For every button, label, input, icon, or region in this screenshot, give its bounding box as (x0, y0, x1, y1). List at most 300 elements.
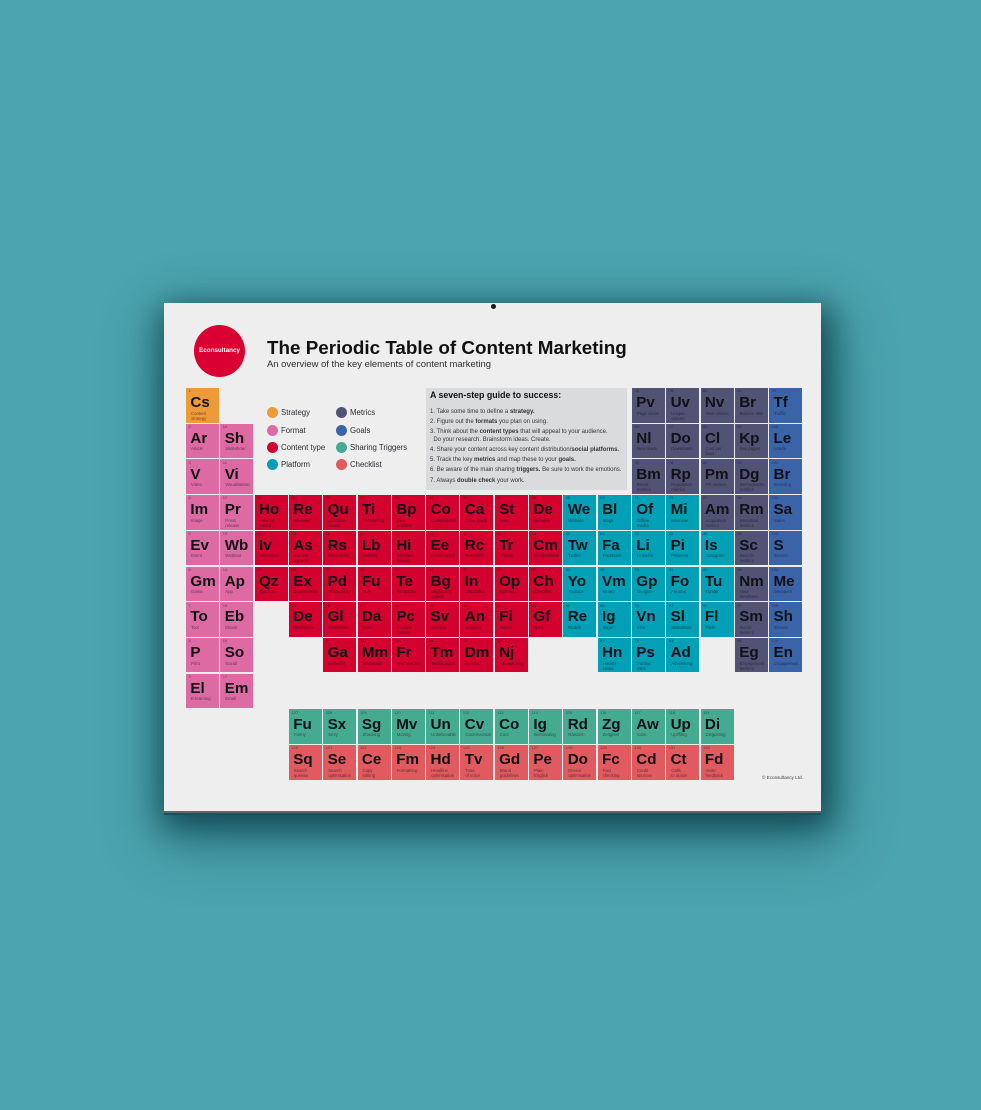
element: Br (735, 388, 768, 423)
element: Qz (255, 566, 288, 601)
element: Tu: Tumblr (706, 589, 719, 594)
element: Sa: 102 (772, 495, 778, 500)
element: Iv (255, 531, 288, 565)
panel: seven-step guide (426, 388, 627, 490)
element: Tr (495, 531, 528, 565)
element: Is: Is (705, 537, 718, 554)
element: Hn: Hacker (603, 661, 616, 666)
element: Gl: 28 (326, 603, 330, 608)
element: Rd: 115 (566, 710, 572, 715)
element: Yo (563, 566, 596, 601)
element: El: 9 (188, 674, 191, 679)
element: Wb: 13 (223, 531, 227, 536)
element: Mi: Mi (671, 501, 687, 518)
element: De: 24 (291, 603, 296, 608)
element: Zg: Zg (602, 716, 621, 733)
element: Pc: Product (397, 625, 412, 630)
element: Tm: Tm (430, 644, 453, 661)
element: Yo: 61 (566, 567, 570, 572)
element: Di: Di (705, 716, 720, 733)
element: Tu (700, 566, 734, 601)
element: Ca (460, 495, 493, 530)
element: En (769, 638, 802, 672)
legend (267, 407, 407, 470)
element: Fa (598, 531, 631, 565)
element: Pe: English (534, 773, 548, 778)
element: Co: Co (430, 501, 451, 518)
element: Ex: Experiments (294, 589, 318, 594)
element: Cd (632, 745, 665, 780)
element: So: 16 (223, 638, 227, 643)
element: Di: 119 (703, 710, 709, 715)
element: Tv: Tv (465, 751, 483, 768)
element: Wb: Wb (225, 537, 248, 554)
element: Tr: 51 (497, 531, 502, 536)
legend item: Sharing Triggers: Sharing Triggers (350, 442, 407, 452)
element: Ps: 75 (634, 638, 639, 643)
element: Aw (632, 709, 665, 744)
element: P: P (190, 644, 201, 661)
element: Yo: Youtube (568, 589, 584, 594)
title: The Periodic Table of Content Marketing (267, 337, 627, 358)
element: To (186, 602, 219, 637)
element: Ar: Article (191, 446, 203, 451)
element: Te: 37 (394, 567, 399, 572)
element: Fd (700, 745, 734, 780)
element group: format (186, 424, 253, 708)
element: Dm: Dm (465, 644, 489, 661)
element: Sm: metrics (740, 630, 754, 635)
element: Nl: Nl (636, 430, 651, 447)
element: El: El (190, 680, 205, 697)
element: Rc: 46 (463, 531, 467, 536)
element: Nj: Nj (499, 644, 514, 661)
legend item: Metrics (336, 407, 375, 418)
element: Mv: Mv (396, 716, 417, 733)
element: To: To (190, 608, 208, 625)
element: St: St (499, 501, 514, 518)
element: Cd: sources (637, 773, 652, 778)
element: Sh (769, 602, 802, 637)
element: Le: Leads (774, 446, 786, 451)
element: Sq: Sq (293, 751, 313, 768)
element: Gf: Gf (533, 608, 550, 625)
element: Bg: Bg (430, 573, 451, 590)
element: Is: Instagram (706, 553, 725, 558)
element: Iv: Iv (259, 537, 272, 554)
element: Zg: Zeitgeist (603, 732, 619, 737)
element: Op: Opinions (500, 589, 517, 594)
element: Aw: Aw (636, 716, 659, 733)
element: Vi: Visualisation (225, 482, 249, 487)
element: Sh: Slideshow (225, 446, 245, 451)
element: Me: 104 (772, 567, 778, 572)
element: Fc: Fc (602, 751, 620, 768)
element: Ga: 29 (326, 638, 330, 643)
element: Lb (358, 531, 390, 565)
legend item: Format: Format (281, 426, 306, 434)
legend item: Metrics: Metrics (350, 408, 375, 416)
element: Tf (769, 388, 802, 423)
element: Nl: New leads (637, 446, 657, 451)
element: Ct: 131 (669, 745, 675, 750)
legend item: Strategy: Strategy (281, 408, 310, 416)
element: De: De (293, 608, 313, 625)
element: Me (769, 566, 802, 601)
element: Ap: 14 (223, 567, 227, 572)
element: Fi: 53 (497, 603, 502, 608)
element: Gp: 73 (634, 567, 639, 572)
element: Ev: Event (191, 553, 202, 558)
element: Nm (735, 566, 768, 601)
element: An: 48 (463, 603, 467, 608)
element: Tv: Tone (465, 768, 475, 773)
element: Mm (358, 638, 390, 672)
element: Do: 77 (669, 424, 673, 429)
element: Ti (358, 495, 390, 530)
element: Sv: Surveys (431, 625, 447, 630)
element: Em (220, 674, 253, 708)
element: Ee: 41 (429, 531, 433, 536)
legend item: Goals (336, 425, 370, 436)
element: Cl: Cost per (706, 446, 722, 451)
legend item: Sharing Triggers (336, 442, 407, 453)
element: Fc: Fact (603, 768, 611, 773)
element: Bl: Bl (602, 501, 617, 518)
element: Ps: Ps (636, 644, 655, 661)
element: Cv: Cv (465, 716, 484, 733)
element group: goals (769, 388, 802, 672)
element: Ar (186, 424, 219, 458)
element: Fo (666, 566, 699, 601)
element: Cl (700, 424, 734, 458)
element: Bm: Bm (636, 466, 661, 483)
step 4: 4. Share your content across key content distribution/social platforms. (430, 447, 619, 453)
element: Se: Search (328, 768, 342, 773)
element: We (563, 495, 596, 530)
element: Rp: Rp (671, 466, 691, 483)
element: Ex (289, 566, 322, 601)
element: Rm: Rm (739, 501, 764, 518)
element: Wb (220, 531, 253, 565)
element: Ct: Ct (671, 751, 687, 768)
element: Hi: based (397, 558, 409, 563)
element: Fo: 81 (669, 567, 673, 572)
element: Sv: 43 (429, 603, 433, 608)
element: Sc: Search (740, 553, 753, 558)
element: Am: Am (705, 501, 729, 518)
element: Do (563, 745, 596, 780)
element: Cl: lead (706, 451, 714, 456)
element: Tv: 125 (463, 745, 470, 750)
element: Fr: 39 (394, 638, 399, 643)
element: Li (632, 531, 665, 565)
element: Is: 88 (703, 531, 707, 536)
element: Am: Acquisition (706, 518, 726, 523)
element: Pe: Pe (533, 751, 552, 768)
element: Cs (186, 388, 219, 423)
element: Pv: Pv (636, 394, 655, 411)
element: Ch: 57 (532, 567, 536, 572)
element: Sg: 109 (360, 710, 367, 715)
element: Bg: guides (431, 594, 444, 599)
element: Ex: Ex (293, 573, 312, 590)
logo: Econsultancy: Econsultancy (199, 347, 240, 354)
element: Fl: Flickr (706, 625, 716, 630)
element: Ig: 66 (600, 603, 605, 608)
element: Ga: Ga (328, 644, 348, 661)
element: Pr: release (225, 523, 239, 528)
element: Ig: Illuminating (534, 732, 556, 737)
element: Pv: 68 (634, 388, 639, 393)
element: Mi: 79 (669, 495, 673, 500)
element: Aw: Cute (637, 732, 646, 737)
element: Ct: Calls (671, 768, 681, 773)
element: Zg (598, 709, 631, 744)
element: Re: Re (568, 608, 587, 625)
element: As: Ask the (294, 553, 308, 558)
element: Fa: 64 (600, 531, 605, 536)
element: Vm: Vimeo (603, 589, 615, 594)
element: Tw: Tw (568, 537, 588, 554)
element: Fu (289, 709, 322, 744)
element: Nv (700, 388, 734, 423)
element: Bl: Blogs (603, 518, 613, 523)
element: Rs: Resources (328, 553, 349, 558)
element: Li: 72 (634, 531, 639, 536)
element: Cv: 112 (463, 710, 469, 715)
element: Cl: 85 (703, 424, 707, 429)
element: So: Social (225, 661, 237, 666)
element: V: Video (191, 482, 202, 487)
element: Pr: Press (225, 518, 236, 523)
element: Hi: 36 (394, 531, 399, 536)
element: Sg (358, 709, 390, 744)
element: El (186, 674, 219, 708)
element: Pm: Pm (705, 466, 729, 483)
element: Vi (220, 459, 253, 494)
element: Ti: Ti (362, 501, 375, 518)
element: Tv (460, 745, 493, 780)
element: Kp: 92 (737, 424, 742, 429)
element: Zg: 116 (600, 710, 606, 715)
element: Ho: based (260, 523, 271, 528)
element: Br (769, 459, 802, 494)
element: Hd: Headline (431, 768, 448, 773)
element: S: 103 (772, 531, 778, 536)
element: Cv (460, 709, 493, 744)
element: Te: Te (396, 573, 413, 590)
element: Ap (220, 566, 253, 601)
element: Of: Of (636, 501, 653, 518)
element: Uv: 76 (669, 388, 673, 393)
element: Pe: 127 (532, 745, 538, 750)
element: Se: optimisation (328, 773, 351, 778)
element: Co: Compilations (431, 518, 456, 523)
element: Vn: 74 (634, 603, 639, 608)
element: Vi: Vi (225, 466, 239, 483)
element: Sg: Shocking (362, 732, 380, 737)
logo: Econsultancy (194, 325, 245, 377)
element: Aw: 117 (634, 710, 641, 715)
element: Fu (358, 566, 390, 601)
element: Sh: Sh (773, 608, 793, 625)
element: Tw: 60 (566, 531, 570, 536)
element: Gf: GIFs (534, 625, 543, 630)
element: Hi (392, 531, 425, 565)
element: Dm: Demos (465, 661, 479, 666)
element: Fi (495, 602, 528, 637)
element: Ig: Ig (533, 716, 547, 733)
element: Ex: 23 (291, 567, 296, 572)
element: Bm: 70 (634, 460, 639, 465)
element: Ee (426, 531, 459, 565)
element: In (460, 566, 493, 601)
element: Un: 111 (429, 710, 435, 715)
element: Eg (735, 638, 768, 672)
element: Re (289, 495, 322, 530)
element: Am: 87 (703, 495, 707, 500)
element: Ce: editing (362, 773, 375, 778)
element: Ca: Case study (465, 518, 487, 523)
element: Le: 100 (772, 424, 778, 429)
element: Bp: 35 (394, 495, 399, 500)
element: Gm: 6 (188, 567, 191, 572)
element: Up: 118 (669, 710, 675, 715)
element: Eg: metrics (740, 666, 754, 671)
element: De: De (533, 501, 553, 518)
element: Sl: 82 (669, 603, 673, 608)
element: Gm: Gm (190, 573, 216, 590)
element: Up: Up (671, 716, 691, 733)
element: In: In (465, 573, 478, 590)
element: Sv: Sv (430, 608, 449, 625)
element: Fr (392, 638, 425, 672)
element group: sharing triggers (289, 709, 734, 744)
element: Qu: 25 (326, 495, 330, 500)
element: Hn (598, 638, 631, 672)
element: Ho: How to/ (260, 518, 274, 523)
element: Do (666, 424, 699, 458)
element: Sh: Sh (225, 430, 244, 447)
element: Fu: Fun (362, 589, 370, 594)
element: Hi: Hi (396, 537, 411, 554)
step 3: 3. Think about the content types that will appeal to your audience. (430, 429, 608, 435)
element: Re: Re (293, 501, 313, 518)
element: Cm: 56 (532, 531, 536, 536)
element: Pr: Pr (225, 501, 241, 518)
element: Da (358, 602, 390, 637)
element: Sa: Sa (773, 501, 792, 518)
element: Nv: Nv (705, 394, 724, 411)
element: Lb: 31 (360, 531, 364, 536)
element: Of: Offline (637, 518, 649, 523)
element: Bl: 63 (600, 495, 605, 500)
element: Rp (666, 459, 699, 494)
step 6: 6. Be aware of the main sharing triggers. Be sure to work the emotions. (430, 467, 621, 473)
element: Sm: 97 (737, 603, 742, 608)
element: St (495, 495, 528, 530)
element: Sc (735, 531, 768, 565)
element: Ga (323, 638, 356, 672)
element: Sx: 108 (326, 710, 332, 715)
element: Da: Data (362, 625, 372, 630)
element: Sl (666, 602, 699, 637)
element: Rc (460, 531, 493, 565)
subtitle: An overview of the key elements of content marketing (267, 359, 491, 370)
element: Nm: members (740, 594, 758, 599)
element: Em: 17 (223, 674, 227, 679)
element: Li: LinkedIn (637, 553, 653, 558)
element: Sq: 120 (291, 745, 298, 750)
element: Mv: Moving (397, 732, 411, 737)
element: Tf: 99 (772, 388, 776, 393)
element: Rc: Rc (465, 537, 484, 554)
element: Sh (220, 424, 253, 458)
element: Nl (632, 424, 665, 458)
element: Nj (495, 638, 528, 672)
element: Fo: Forums (671, 589, 686, 594)
legend item: Checklist: Checklist (350, 460, 382, 468)
element: Gd: 126 (497, 745, 504, 750)
element: Hn: 67 (600, 638, 605, 643)
element: Em: Email (225, 696, 236, 701)
element: Im: Im (190, 501, 208, 518)
element: Fi: Fiction (500, 625, 512, 630)
element: Re: Reddit (568, 625, 581, 630)
element: Eb (220, 602, 253, 637)
element: Rs: 26 (326, 531, 330, 536)
element: Bg (426, 566, 459, 601)
element: Co (426, 495, 459, 530)
element: Sq: Search (294, 768, 308, 773)
element: Bg: Beginner's (431, 589, 451, 594)
element: Sc: 95 (737, 531, 742, 536)
element: Ho (255, 495, 288, 530)
element: Rs: Rs (328, 537, 347, 554)
element: St: Stats (500, 518, 509, 523)
element: Ca: 45 (463, 495, 467, 500)
element: Le (769, 424, 802, 458)
element: Rd: Random (568, 732, 585, 737)
element: Rp: Reputation (671, 482, 692, 487)
element: Uv: Uv (671, 394, 690, 411)
step 1: 1. Take some time to define a strategy. (430, 409, 535, 415)
element: Ev (186, 531, 219, 565)
element: En: 106 (772, 638, 778, 643)
element: We: We (568, 501, 590, 518)
element: Un (426, 709, 459, 744)
element: Rp: metrics (671, 487, 685, 492)
element: Rm (735, 495, 768, 530)
element group: content type (255, 495, 562, 672)
element: Ig: Ig (602, 608, 615, 625)
element: Hd (426, 745, 459, 780)
element: Br: Branding (774, 482, 791, 487)
element: S (769, 531, 802, 565)
element: Gf (529, 602, 562, 637)
element: Cm: Competitions (534, 553, 559, 558)
element group: platform (563, 495, 734, 672)
element: Ce: Ce (362, 751, 381, 768)
element: Pc: based (397, 630, 409, 635)
element: Ev: Ev (190, 537, 209, 554)
element: Uv: Unique (671, 411, 685, 416)
element: Sa (769, 495, 802, 530)
element: Bm: metrics (637, 487, 651, 492)
element: Mi: Microsite (671, 518, 688, 523)
element: Pc (392, 602, 425, 637)
